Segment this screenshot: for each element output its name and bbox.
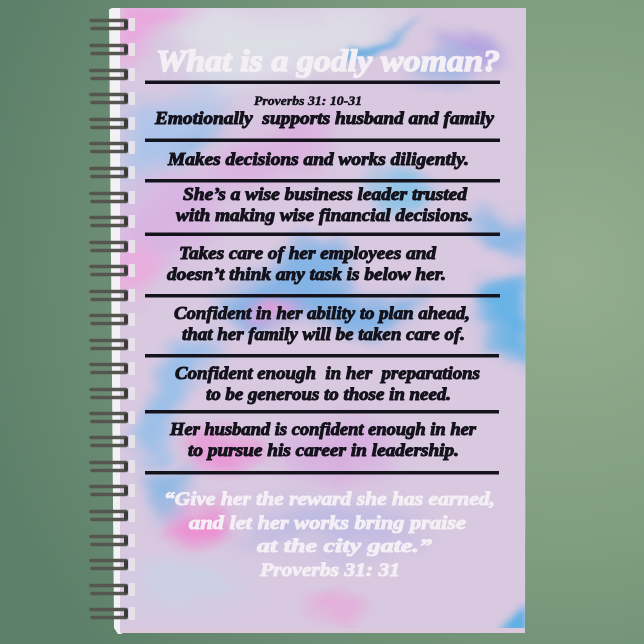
divider lines — [145, 80, 500, 474]
item: generosity — [175, 363, 480, 404]
item: business leader: She’s a wise business leader trusted — [183, 184, 467, 204]
closing quote: Proverbs 31: 31 — [259, 560, 400, 581]
scripture reference: Proverbs 31: 10-31 — [254, 94, 362, 108]
spiral binding — [91, 18, 135, 620]
closing quote — [164, 489, 495, 581]
item: planning ahead — [174, 303, 470, 344]
item: husband — [169, 419, 476, 460]
white page edge — [109, 8, 122, 634]
item: employees: doesn’t think any task is below her. — [167, 264, 446, 284]
item: planning ahead: that her family will be taken care of. — [182, 324, 465, 344]
marbled cover — [115, 8, 526, 634]
item: generosity: to be generous to those in need. — [206, 384, 451, 404]
closing quote: “Give her the reward she has earned, — [164, 489, 495, 510]
item: employees: Takes care of her employees and — [179, 243, 436, 263]
item: business leader: with making wise financial decisions. — [176, 205, 473, 225]
notebook — [109, 8, 526, 634]
item: emotional support: Emotionally supports husband and family — [154, 108, 494, 128]
item: decisions: Makes decisions and works diligently. — [167, 149, 469, 169]
item: husband: to pursue his career in leadership. — [188, 440, 459, 460]
item: employees — [167, 243, 446, 284]
item: husband: Her husband is confident enough in her — [169, 419, 476, 439]
title: What is a godly woman? — [156, 43, 500, 78]
closing quote: and let her works bring praise — [189, 513, 467, 534]
closing quote: at the city gate.” — [257, 536, 433, 557]
item: business leader — [176, 184, 473, 225]
item: planning ahead: Confident in her ability to plan ahead, — [174, 303, 470, 323]
item: generosity: Confident enough in her preparations — [175, 363, 480, 383]
